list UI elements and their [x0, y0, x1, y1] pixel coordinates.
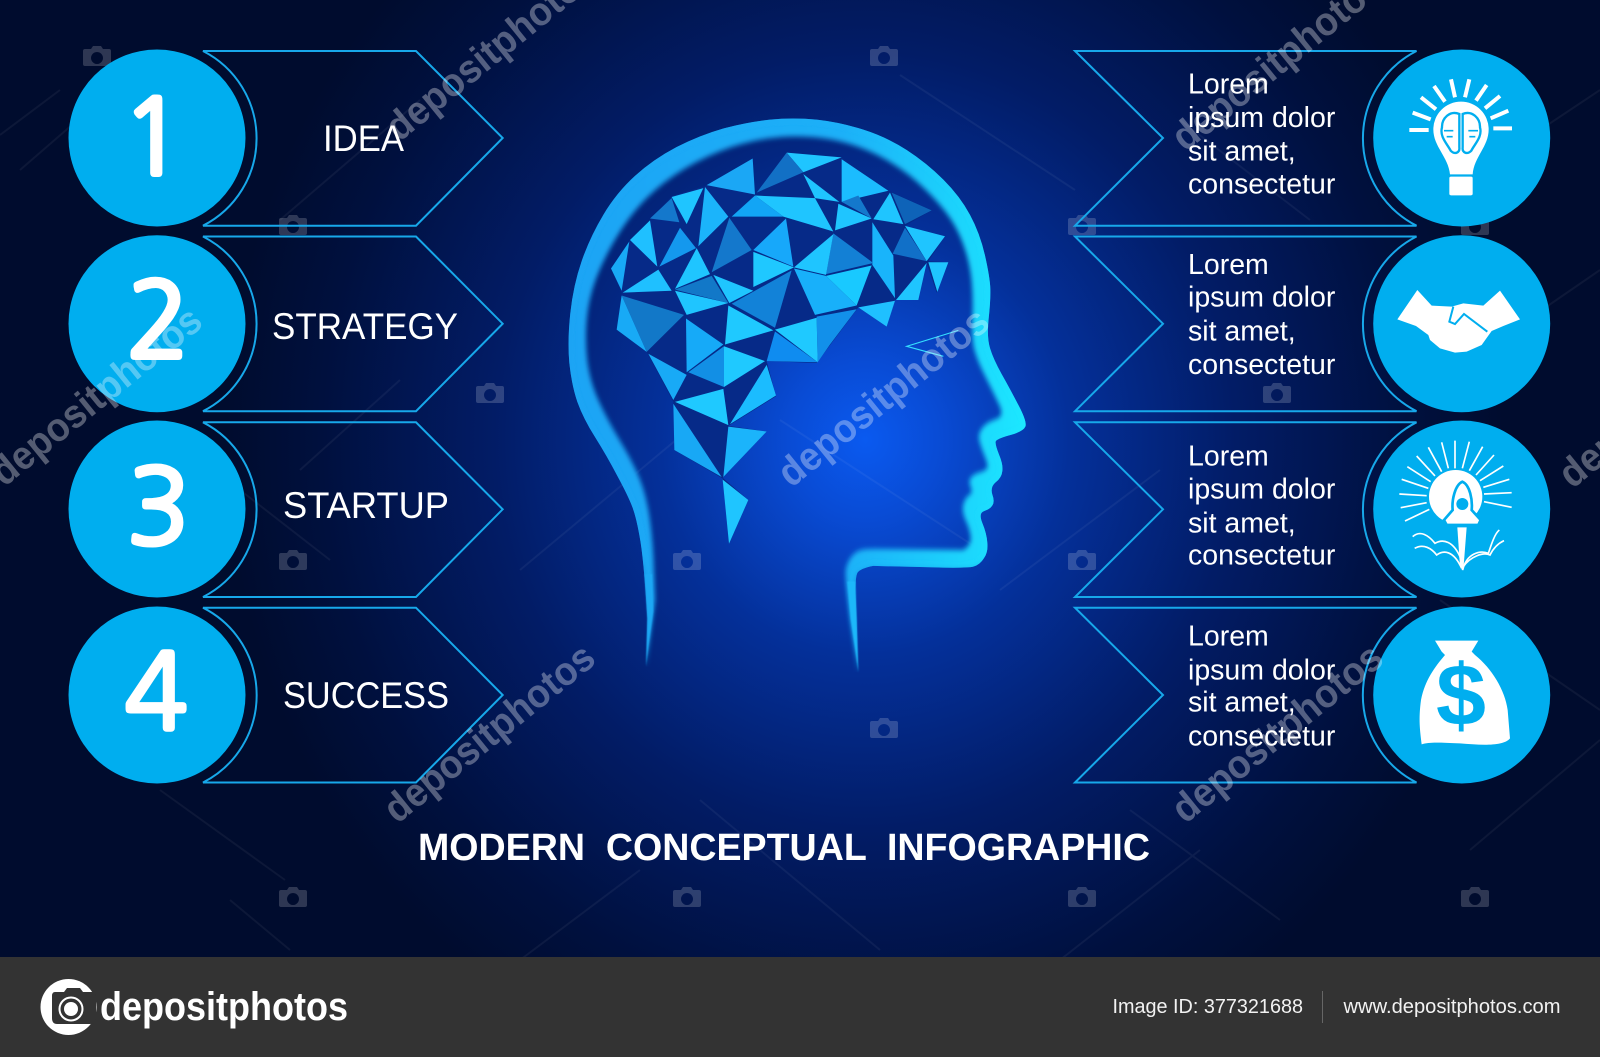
- watermarks: depositphotos: [375, 635, 603, 832]
- right panel 2: handshake: [1075, 235, 1550, 412]
- text block 1: consectetur: [1188, 168, 1336, 200]
- watermark camera icons: [83, 46, 1489, 907]
- number circle 3: 3: [127, 455, 190, 559]
- ribbon frame 4: [1075, 608, 1416, 782]
- text block 3: ipsum dolor: [1188, 474, 1336, 506]
- polygon brain: [611, 153, 948, 544]
- left step 4: success: [68, 606, 503, 784]
- left step 1: idea: [68, 50, 503, 226]
- ribbon frame 1: [1075, 51, 1416, 226]
- circle 1: [1373, 50, 1550, 226]
- title: MODERN CONCEPTUAL INFOGRAPHIC: [418, 827, 1150, 869]
- number circle 4: [68, 606, 246, 784]
- label startup: STARTUP: [283, 485, 449, 526]
- number circle 2: 2: [126, 268, 190, 372]
- icon: money bag: [1420, 641, 1510, 745]
- right panel 1: idea bulb: [1075, 50, 1550, 226]
- text block 4: ipsum dolor: [1188, 654, 1336, 686]
- number circle 3: [68, 420, 246, 598]
- label idea: IDEA: [323, 118, 404, 159]
- text block 1: sit amet,: [1188, 136, 1296, 168]
- footer logo icon: [40, 979, 96, 1035]
- circle 2: [1373, 235, 1550, 412]
- text block 3: Lorem: [1188, 440, 1269, 472]
- left step 3: startup: [68, 420, 503, 598]
- arrow frame 4: [203, 608, 503, 782]
- ribbon frame 3: [1075, 422, 1416, 597]
- footer bar: [0, 957, 1600, 1057]
- text block 2: consectetur: [1188, 349, 1336, 381]
- icon: handshake: [1397, 290, 1520, 353]
- image id: Image ID: 377321688: [1112, 996, 1303, 1018]
- footer logo wordmark: depositphotos: [100, 985, 348, 1029]
- text block 4: consectetur: [1188, 720, 1336, 752]
- text block 3: consectetur: [1188, 540, 1336, 572]
- text block 2: ipsum dolor: [1188, 282, 1336, 314]
- text block 2: Lorem: [1188, 249, 1269, 281]
- number circle 1: 1: [121, 85, 185, 189]
- text block 1: ipsum dolor: [1188, 102, 1336, 134]
- label strategy: STRATEGY: [272, 306, 458, 347]
- text block 4: Lorem: [1188, 620, 1269, 652]
- number circle 4: 4: [124, 640, 188, 744]
- right panel 3: rocket: [1075, 420, 1550, 598]
- head illustration: [569, 119, 1026, 672]
- ribbon frame 2: [1075, 236, 1416, 411]
- watermarks: depositphotos: [1163, 635, 1391, 832]
- eye lines: [907, 330, 958, 356]
- circle 4: [1373, 606, 1550, 784]
- icon: rocket and sun: [1399, 441, 1512, 570]
- website url: www.depositphotos.com: [1342, 996, 1560, 1018]
- arrow frame 3: [203, 422, 503, 597]
- text block 4: sit amet,: [1188, 686, 1296, 718]
- text block 3: sit amet,: [1188, 508, 1296, 540]
- number circle 2: [68, 235, 246, 412]
- circle 3: [1373, 420, 1550, 598]
- left step 2: strategy: [68, 235, 503, 412]
- right panel 4: money bag: [1075, 606, 1550, 784]
- text block 1: Lorem: [1188, 68, 1269, 100]
- footer divider: [1322, 991, 1323, 1023]
- icon: lightbulb with brain: [1409, 79, 1512, 195]
- number circle 1: [68, 50, 246, 226]
- head outline glow: [569, 119, 1026, 672]
- text block 2: sit amet,: [1188, 316, 1296, 348]
- label success: SUCCESS: [283, 675, 449, 716]
- arrow frame 2: [203, 236, 503, 411]
- arrow frame 1: [203, 51, 503, 226]
- watermarks: [0, 0, 1600, 832]
- watermarks: depositphotos: [769, 299, 997, 496]
- icon: money bag: $: [1436, 646, 1486, 744]
